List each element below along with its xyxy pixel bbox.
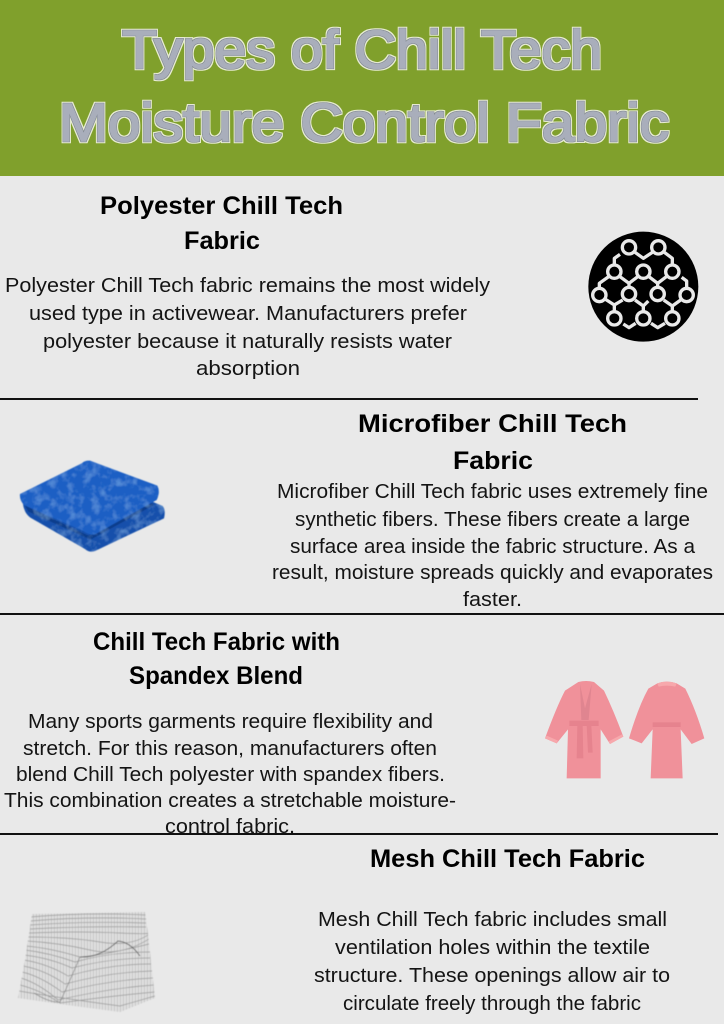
image: pink robes [545, 681, 704, 778]
heading: polyester [100, 192, 343, 255]
header banner [0, 0, 724, 176]
title: Types of Chill Tech [122, 20, 602, 80]
robe front [545, 681, 623, 778]
heading: polyester: Polyester Chill Tech [100, 192, 343, 220]
text: polyester description: polyester because it naturally resists water [43, 331, 452, 353]
image: mesh fabric sheet [15, 910, 157, 1015]
heading: spandex blend: Spandex Blend [129, 662, 303, 690]
text: mesh description: ventilation holes within the textile [335, 937, 650, 959]
divider [0, 833, 718, 835]
title: Moisture Control Fabric [59, 93, 669, 153]
text: spandex description [4, 711, 456, 838]
text: mesh description [314, 909, 670, 1015]
text: microfiber description: Microfiber Chill Tech fabric uses extremely fine [277, 481, 708, 503]
text: microfiber description: synthetic fibers. These fibers create a large [295, 509, 690, 531]
heading: mesh: Mesh Chill Tech Fabric [370, 845, 645, 873]
text: polyester description: absorption [196, 358, 300, 380]
panel: polyester [5, 192, 698, 380]
text: mesh description: Mesh Chill Tech fabric includes small [318, 909, 667, 931]
heading: spandex blend [93, 628, 340, 690]
heading: microfiber [358, 410, 627, 475]
text: spandex description: This combination creates a stretchable moisture- [4, 790, 456, 812]
text: spandex description: control fabric. [165, 816, 295, 838]
text: polyester description: Polyester Chill Tech fabric remains the most widely [5, 275, 490, 297]
text: microfiber description: result, moisture spreads quickly and evaporates [272, 562, 713, 584]
text: microfiber description [272, 481, 713, 611]
text: polyester description [5, 275, 490, 380]
text: polyester description: used type in activewear. Manufacturers prefer [29, 303, 467, 325]
heading: polyester: Fabric [184, 227, 260, 255]
panel: spandex blend [4, 628, 704, 838]
panel: microfiber [20, 410, 713, 611]
text: microfiber description: faster. [463, 589, 522, 611]
text: spandex description: Many sports garments require flexibility and [28, 711, 433, 733]
divider [0, 613, 724, 615]
heading: microfiber: Microfiber Chill Tech [358, 410, 627, 438]
panel: mesh [15, 845, 670, 1015]
robe back [629, 682, 704, 778]
heading: spandex blend: Chill Tech Fabric with [93, 628, 340, 656]
text: mesh description: structure. These openings allow air to [314, 965, 670, 987]
icon: molecular network [588, 232, 698, 342]
image: folded blue towel [20, 461, 165, 552]
heading: microfiber: Fabric [453, 447, 533, 475]
text: spandex description: stretch. For this reason, manufacturers often [23, 738, 437, 760]
text: mesh description: circulate freely through the fabric [343, 993, 641, 1015]
divider [0, 398, 698, 400]
text: spandex description: blend Chill Tech polyester with spandex fibers. [16, 764, 445, 786]
text: microfiber description: surface area inside the fabric structure. As a [290, 536, 696, 558]
title [59, 20, 669, 153]
